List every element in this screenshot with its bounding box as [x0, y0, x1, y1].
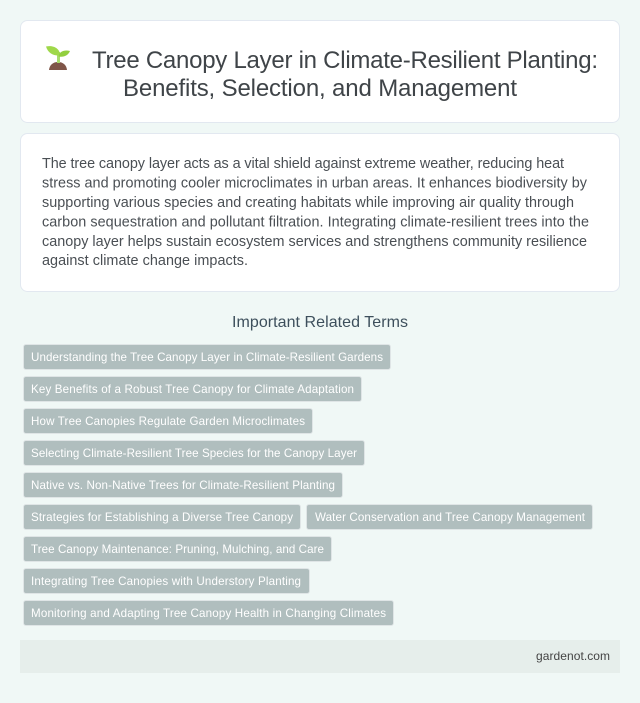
footer text: site name: gardenot.com — [536, 649, 610, 663]
title text: Benefits, Selection, and Management — [123, 75, 517, 102]
heading: important related terms: Important Related Terms — [232, 314, 408, 331]
tag: maintenance — [24, 536, 332, 562]
tag: maintenance: Tree Canopy Maintenance: Pruning, Mulching, and Care — [31, 543, 324, 556]
tag: key benefits: Key Benefits of a Robust Tree Canopy for Climate Adaptation — [31, 383, 354, 396]
tag: understanding — [24, 344, 390, 370]
paragraph text — [42, 156, 589, 269]
tag: species selection — [24, 440, 364, 466]
tag: understory — [24, 568, 310, 594]
tag: native vs non-native — [24, 472, 342, 498]
paragraph text: stress and promoting cooler microclimates in urban areas. It enhances biodiversity by — [42, 176, 588, 192]
paragraph text: canopy layer helps sustain ecosystem services and strengthens community resilience — [42, 234, 587, 250]
tag: water conservation — [306, 504, 592, 530]
title text: Tree Canopy Layer in Climate-Resilient Planting: — [92, 47, 598, 74]
tag: understory: Integrating Tree Canopies with Understory Planting — [31, 575, 301, 588]
paragraph text: against climate change impacts. — [42, 253, 248, 269]
panel: related terms list — [24, 344, 592, 626]
tag: native vs non-native: Native vs. Non-Native Trees for Climate-Resilient Planting — [31, 479, 335, 492]
tag: monitoring: Monitoring and Adapting Tree Canopy Health in Changing Climates — [31, 607, 386, 620]
tag: diverse canopy — [24, 504, 300, 530]
tag: species selection: Selecting Climate-Resilient Tree Species for the Canopy Layer — [31, 447, 357, 460]
icon: seedling — [46, 46, 70, 70]
paragraph text: supporting various species and creating habitats while improving air quality through — [42, 195, 574, 211]
tag: microclimates — [24, 408, 312, 434]
tag: water conservation: Water Conservation and Tree Canopy Management — [315, 511, 586, 524]
panel: intro paragraph — [20, 134, 620, 292]
tag: monitoring — [24, 600, 394, 626]
tag: key benefits — [24, 376, 362, 402]
panel: title card — [20, 20, 620, 122]
title text — [92, 47, 598, 102]
tag: understanding: Understanding the Tree Canopy Layer in Climate-Resilient Gardens — [31, 351, 383, 364]
footer bar — [20, 640, 620, 673]
tag: microclimates: How Tree Canopies Regulate Garden Microclimates — [31, 415, 305, 428]
paragraph text: carbon sequestration and pollutant filtration. Integrating climate-resilient trees into the — [42, 214, 589, 230]
paragraph text: The tree canopy layer acts as a vital shield against extreme weather, reducing heat — [42, 156, 564, 172]
tag: diverse canopy: Strategies for Establishing a Diverse Tree Canopy — [31, 511, 293, 524]
